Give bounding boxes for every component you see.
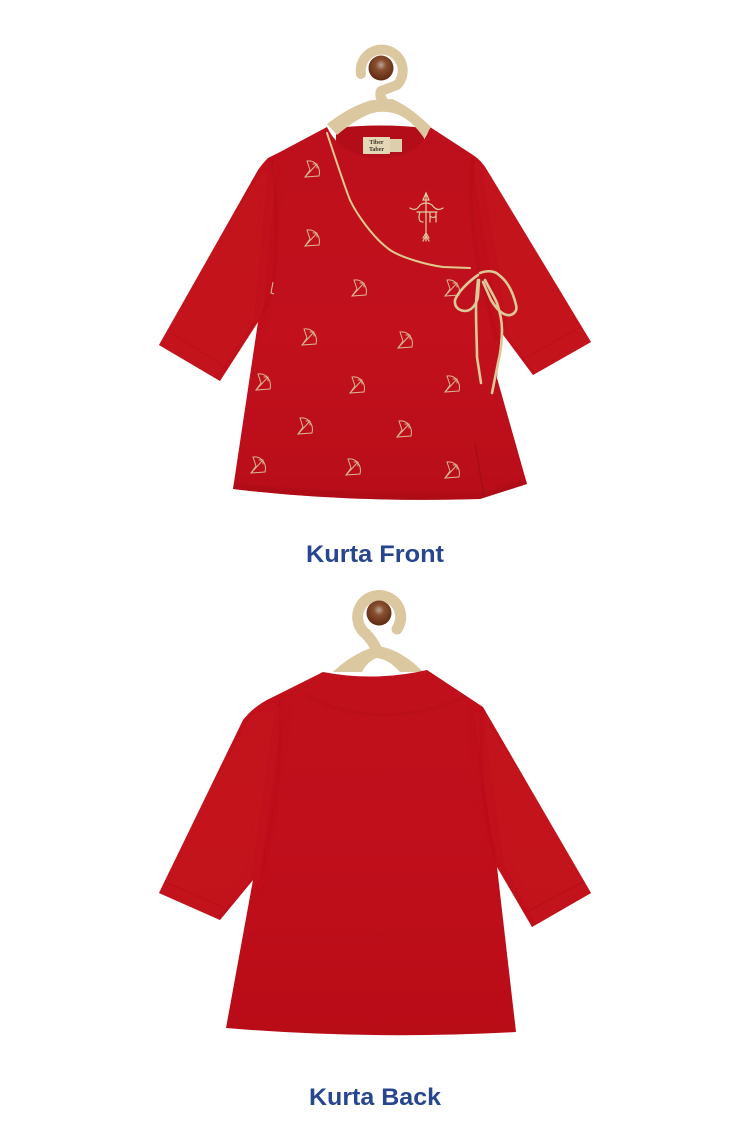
garment: kurta front	[150, 126, 600, 510]
inner back neck	[336, 126, 424, 172]
fabric shading	[150, 695, 600, 930]
garment: kurta back	[150, 670, 600, 1035]
caption: Kurta Back: Kurta Back	[309, 1084, 442, 1111]
brand label	[363, 137, 402, 154]
brand label: Taber	[369, 147, 384, 153]
infographic canvas	[159, 44, 591, 1105]
brand label: Tiber	[369, 140, 384, 146]
hanger knob	[366, 600, 392, 626]
caption: Kurta Front: Kurta Front	[306, 541, 444, 568]
bow and arrow embroidery motifs	[251, 161, 459, 478]
hanger knob	[368, 56, 394, 80]
tie cord bow	[455, 271, 516, 393]
gold piping	[327, 133, 470, 268]
hanger: front view	[327, 50, 431, 138]
hanger: back view	[333, 595, 423, 672]
chest emblem: arrow and bow	[410, 193, 443, 241]
fabric shading	[150, 157, 600, 510]
